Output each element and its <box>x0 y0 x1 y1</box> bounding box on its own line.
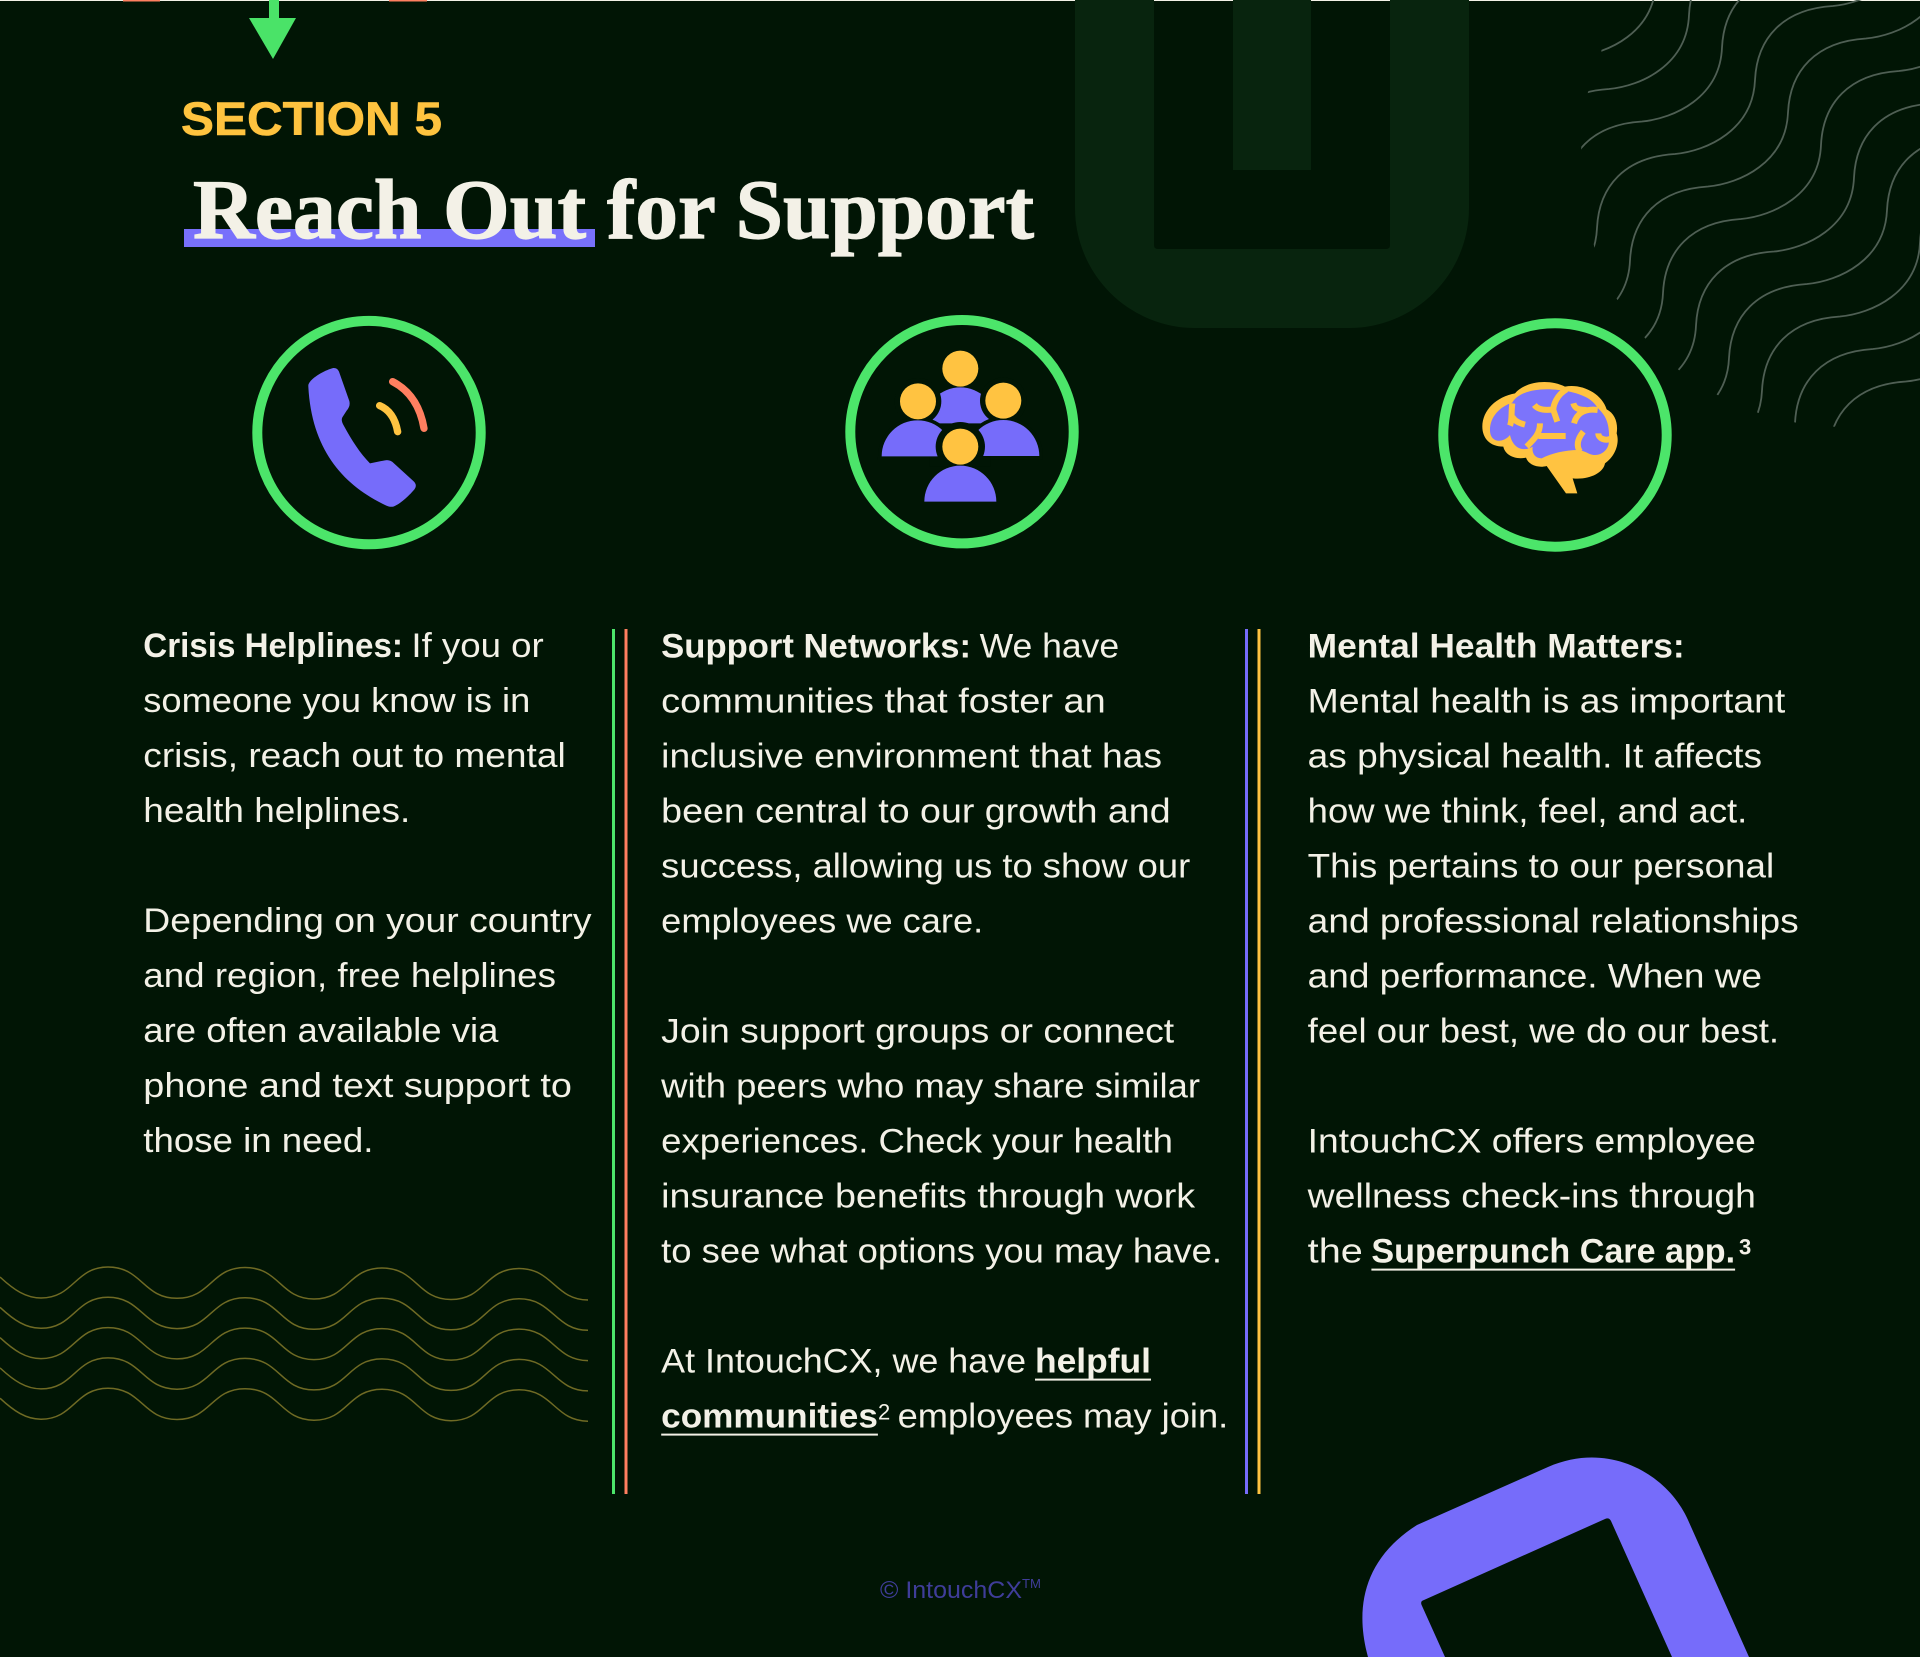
icon: group of people <box>850 320 1074 543</box>
text block: support networks: 2 <box>878 1400 890 1425</box>
section label: SECTION 5 <box>181 92 442 145</box>
arrow: green pointing down <box>249 0 296 59</box>
text block: support networks: At IntouchCX, we have <box>661 1343 1026 1381</box>
text block: mental health matters: as physical health. It affects <box>1308 738 1762 776</box>
text block: support networks: to see what options you may have. <box>661 1233 1222 1271</box>
text block: mental health matters: wellness check-ins through <box>1307 1178 1756 1216</box>
background shape: large U <box>1075 0 1469 328</box>
text block: crisis helplines: and region, free helplines <box>143 957 556 995</box>
text block: support networks: been central to our growth and <box>661 793 1171 831</box>
text block: support networks: communities that foster an <box>661 683 1106 721</box>
text block: crisis helplines <box>143 627 592 1160</box>
text block: support networks: experiences. Check your health <box>661 1123 1173 1161</box>
text block: support networks: We have <box>980 628 1119 666</box>
text block: mental health matters: 3 <box>1739 1235 1751 1260</box>
text block: support networks: Join support groups or connect <box>661 1013 1175 1051</box>
text block: crisis helplines: those in need. <box>143 1122 374 1160</box>
decorative wavy lines left <box>0 1267 588 1421</box>
text block: crisis helplines: health helplines. <box>143 792 410 830</box>
text block: support networks: with peers who may share similar <box>660 1068 1200 1106</box>
text block: support networks: communities <box>661 1398 878 1436</box>
text block: crisis helplines: phone and text support to <box>143 1067 572 1105</box>
text block: mental health matters: how we think, feel, and act. <box>1308 793 1747 831</box>
title <box>184 163 1034 257</box>
text block: mental health matters: Superpunch Care app. <box>1371 1233 1735 1271</box>
text block: mental health matters: the <box>1308 1233 1363 1271</box>
text block: mental health matters: feel our best, we do our best. <box>1308 1013 1779 1051</box>
text block: support networks: helpful <box>1035 1343 1151 1381</box>
decorative wavy lines top right <box>1581 0 1920 427</box>
text block: mental health matters <box>1307 628 1799 1271</box>
text block: support networks: success, allowing us to show our <box>661 848 1190 886</box>
text block: support networks: employees may join. <box>898 1398 1228 1436</box>
text block: mental health matters: This pertains to our personal <box>1308 848 1774 886</box>
text block: crisis helplines: are often available via <box>143 1012 498 1050</box>
text block: crisis helplines: Depending on your country <box>143 902 592 940</box>
text block: support networks: employees we care. <box>661 903 983 941</box>
divider lines: purple and yellow <box>1245 629 1260 1494</box>
text block: crisis helplines: Crisis Helplines: <box>143 627 403 665</box>
icon: phone <box>257 321 481 544</box>
text block: mental health matters: Mental Health Matters: <box>1308 628 1685 666</box>
title: for Support <box>607 163 1034 257</box>
footer copyright: © IntouchCX <box>880 1577 1022 1604</box>
footer copyright: TM <box>1022 1576 1041 1591</box>
title: Reach Out <box>193 163 586 257</box>
background shape: purple rotated frame <box>1362 1458 1749 1657</box>
divider lines: green and orange <box>612 629 628 1494</box>
text block: crisis helplines: If you or <box>411 627 544 665</box>
icon: brain <box>1443 323 1667 547</box>
text block: mental health matters: Mental health is as important <box>1308 683 1786 721</box>
text block: crisis helplines: crisis, reach out to mental <box>143 737 566 775</box>
text block: support networks: inclusive environment that has <box>661 738 1162 776</box>
text block: support networks: insurance benefits through work <box>661 1178 1196 1216</box>
text block: support networks: Support Networks: <box>661 628 971 666</box>
text block: crisis helplines: someone you know is in <box>143 682 530 720</box>
text block: mental health matters: IntouchCX offers employee <box>1308 1123 1756 1161</box>
text block: mental health matters: and professional relationships <box>1308 903 1799 941</box>
text block: mental health matters: and performance. When we <box>1308 958 1762 996</box>
text block: support networks <box>660 628 1228 1436</box>
